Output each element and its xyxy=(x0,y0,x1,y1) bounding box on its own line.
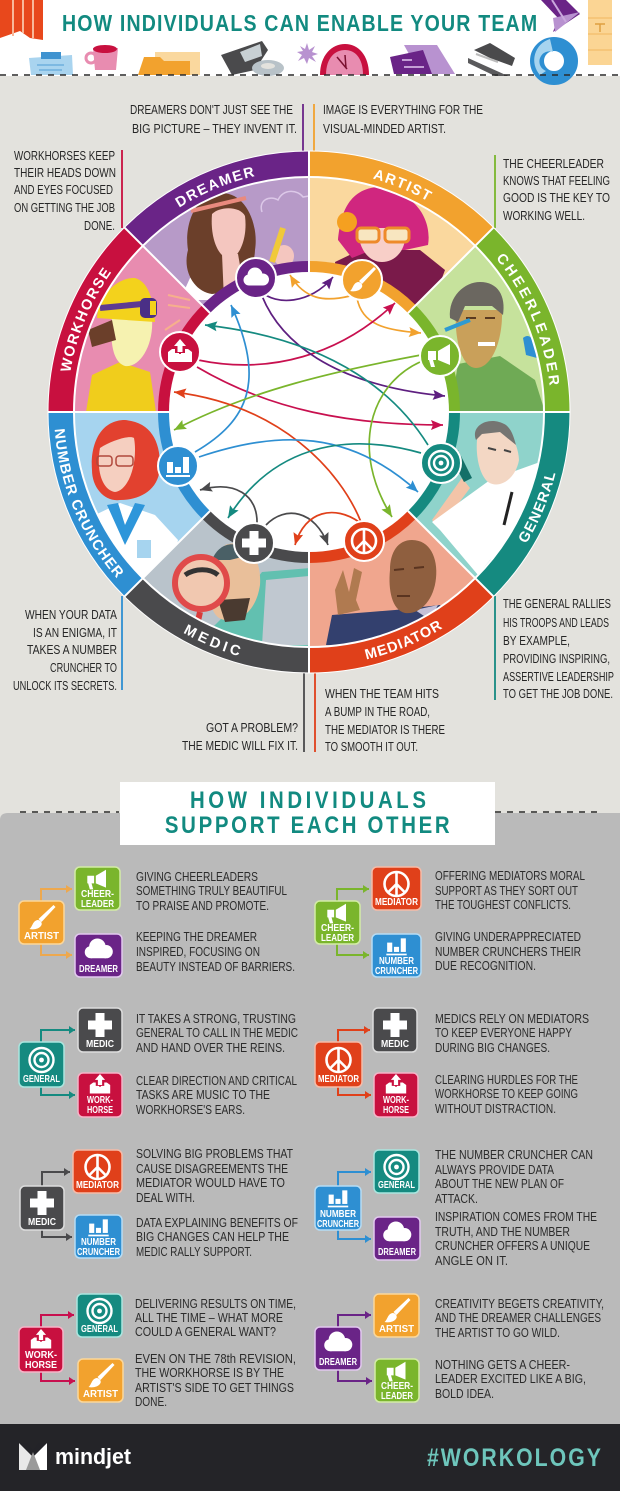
callout leader lines xyxy=(122,104,495,752)
icon: yellow toolbar xyxy=(588,0,612,65)
box: general: GENERAL xyxy=(378,1180,415,1191)
band labels: MEDIATOR xyxy=(364,621,442,660)
icon: purple documents xyxy=(390,45,455,74)
box: artist: ARTIST xyxy=(83,1389,118,1400)
text: workhorse to general xyxy=(135,1297,296,1339)
inner ring segments xyxy=(158,261,460,563)
text: number cruncher to general: ATTACK. xyxy=(435,1192,478,1206)
hashtag: #WORKOLOGY xyxy=(427,1443,601,1471)
band labels: MEDIC xyxy=(184,624,240,656)
box: workhorse: WORK- xyxy=(25,1350,57,1361)
box: dreamer: DREAMER xyxy=(79,964,119,975)
text: mediator to medic: MEDICS RELY ON MEDIATORS xyxy=(435,1012,589,1026)
text: artist to dreamer: KEEPING THE DREAMER xyxy=(136,930,257,944)
text: mediator to medic: DURING BIG CHANGES. xyxy=(435,1041,550,1055)
node: number cruncher xyxy=(158,446,198,486)
text: mediator to medic xyxy=(435,1012,589,1055)
band labels: NUMBER CRUNCHER xyxy=(54,429,123,578)
box: medic xyxy=(373,1008,417,1052)
callout: general: BY EXAMPLE, xyxy=(503,633,570,648)
text: dreamer to artist: THE ARTIST TO GO WILD. xyxy=(435,1326,560,1340)
box: mediator: MEDIATOR xyxy=(76,1180,120,1191)
text: workhorse to artist: DONE. xyxy=(135,1395,167,1409)
callout: mediator: WHEN THE TEAM HITS xyxy=(325,686,439,701)
node: artist xyxy=(342,260,382,300)
text: medic to number cruncher: MEDIC RALLY SUPPORT. xyxy=(136,1245,252,1259)
callout: cheerleader xyxy=(503,156,610,223)
box: number cruncher: CRUNCHER xyxy=(77,1247,121,1258)
callout: workhorse: THEIR HEADS DOWN xyxy=(14,165,116,180)
node: workhorse xyxy=(160,332,200,372)
box: dreamer xyxy=(315,1327,361,1370)
callout: cheerleader: WORKING WELL. xyxy=(503,208,585,223)
box: general xyxy=(19,1042,64,1087)
box: mediator xyxy=(73,1150,122,1193)
portrait: medic xyxy=(144,520,308,646)
box: workhorse xyxy=(78,1073,122,1117)
box: artist xyxy=(19,901,64,944)
callout: workhorse xyxy=(14,148,116,233)
portrait: number cruncher xyxy=(75,413,202,577)
text: mediator to workhorse: WORKHORSE TO KEEP GOING xyxy=(435,1087,578,1101)
title: HOW INDIVIDUALS CAN ENABLE YOUR TEAM xyxy=(62,11,537,36)
callout: artist: VISUAL-MINDED ARTIST. xyxy=(323,121,446,136)
icon: blue donut xyxy=(534,39,571,78)
box: general xyxy=(77,1294,122,1337)
group: artist supports xyxy=(19,867,295,977)
box: artist xyxy=(78,1359,123,1402)
callout: number cruncher xyxy=(13,607,117,693)
text: medic to number cruncher xyxy=(136,1216,298,1259)
text: workhorse to artist: ARTIST'S SIDE TO GET THINGS xyxy=(135,1381,294,1395)
box: dreamer: DREAMER xyxy=(378,1247,417,1258)
node: dreamer xyxy=(236,258,276,298)
icon: pink mug xyxy=(86,45,118,70)
text: artist to cheerleader: SOMETHING TRULY BEAUTIFUL xyxy=(136,884,287,898)
text: workhorse to artist: THE WORKHORSE IS BY THE xyxy=(135,1366,284,1380)
text: mediator to workhorse: WITHOUT DISTRACTION. xyxy=(435,1102,556,1116)
box: dreamer xyxy=(374,1217,420,1260)
text: medic to number cruncher: BIG CHANGES CAN HELP THE xyxy=(136,1230,289,1244)
box: cheerleader: CHEER- xyxy=(321,923,354,934)
box: medic: MEDIC xyxy=(381,1039,409,1050)
box: medic: MEDIC xyxy=(86,1039,114,1050)
icon: red books xyxy=(0,0,43,40)
text: cheerleader to mediator: OFFERING MEDIATORS MORAL xyxy=(435,869,585,883)
text: general to workhorse: CLEAR DIRECTION AND CRITICAL xyxy=(136,1074,297,1088)
text: dreamer to cheerleader xyxy=(435,1358,586,1401)
text: general to workhorse xyxy=(136,1074,297,1117)
callout: number cruncher: IS AN ENIGMA, IT xyxy=(33,625,117,640)
band labels: WORKHORSE xyxy=(60,267,112,371)
text: artist to dreamer: INSPIRED, FOCUSING ON xyxy=(136,945,260,959)
main panel background xyxy=(0,76,620,816)
relationship arrows xyxy=(174,275,445,545)
callout: workhorse: ON GETTING THE JOB xyxy=(14,200,115,215)
callout: workhorse: AND EYES FOCUSED xyxy=(14,182,113,197)
box: general: GENERAL xyxy=(23,1074,60,1085)
outer band segments xyxy=(48,151,570,673)
text: cheerleader to mediator xyxy=(435,869,585,912)
band labels: GENERAL xyxy=(519,473,556,542)
icon: stapler xyxy=(468,43,515,76)
text: number cruncher to general: THE NUMBER CRUNCHER CAN xyxy=(435,1148,593,1162)
box: dreamer xyxy=(75,934,122,977)
header background xyxy=(0,0,620,76)
box: cheerleader xyxy=(75,867,120,910)
dashed divider lower xyxy=(20,811,600,813)
group: number cruncher supports xyxy=(315,1148,597,1268)
portrait: artist xyxy=(310,178,474,304)
text: cheerleader to number cruncher: NUMBER CRUNCHERS THEIR xyxy=(435,945,581,959)
box: general: GENERAL xyxy=(81,1324,118,1335)
header icons row xyxy=(0,0,612,78)
group: dreamer supports xyxy=(315,1294,604,1402)
text: cheerleader to number cruncher: DUE RECOGNITION. xyxy=(435,959,536,973)
dashed divider top xyxy=(0,74,620,76)
box: artist: ARTIST xyxy=(24,931,59,942)
band labels: ARTIST xyxy=(373,170,432,200)
role wheel xyxy=(48,150,570,674)
text: medic to mediator xyxy=(136,1147,293,1205)
box: workhorse: HORSE xyxy=(25,1360,57,1371)
portrait: cheerleader xyxy=(416,247,543,411)
portrait: general xyxy=(416,413,543,577)
box: workhorse: WORK- xyxy=(383,1095,409,1106)
box: workhorse xyxy=(374,1073,418,1117)
text: dreamer to cheerleader: BOLD IDEA. xyxy=(435,1387,494,1401)
group: general supports xyxy=(19,1008,298,1117)
group: workhorse supports xyxy=(19,1294,296,1409)
band labels xyxy=(54,167,559,660)
callout: workhorse: DONE. xyxy=(84,218,115,233)
callout: workhorse: WORKHORSES KEEP xyxy=(14,148,115,163)
text: mediator to medic: TO KEEP EVERYONE HAPPY xyxy=(435,1026,573,1040)
box: medic xyxy=(78,1008,122,1052)
text: cheerleader to mediator: THE TOUGHEST CONFLICTS. xyxy=(435,898,571,912)
box: workhorse: HORSE xyxy=(87,1105,113,1116)
callout: mediator: THE MEDIATOR IS THERE xyxy=(325,722,445,737)
text: general to workhorse: TASKS ARE MUSIC TO THE xyxy=(136,1088,270,1102)
callout: dreamer xyxy=(130,102,297,136)
text: mediator to workhorse xyxy=(435,1073,578,1116)
icon: blue note xyxy=(29,52,73,75)
callout: number cruncher: UNLOCK ITS SECRETS. xyxy=(13,678,117,693)
box: cheerleader xyxy=(375,1359,419,1402)
callout: mediator xyxy=(325,686,445,754)
box: medic xyxy=(20,1186,64,1230)
white centre xyxy=(169,272,449,552)
icon: tape dispenser xyxy=(221,41,284,76)
callout: number cruncher: CRUNCHER TO xyxy=(50,660,117,675)
icon: purple spark xyxy=(297,43,318,64)
box: cheerleader: LEADER xyxy=(321,933,355,944)
node: mediator xyxy=(344,521,384,561)
text: general to medic: AND HAND OVER THE REINS. xyxy=(136,1041,285,1055)
node: medic xyxy=(234,523,274,563)
box: number cruncher: NUMBER xyxy=(320,1209,357,1220)
group: medic supports xyxy=(20,1147,298,1259)
text: workhorse to general: COULD A GENERAL WANT? xyxy=(135,1325,276,1339)
text: workhorse to general: ALL THE TIME – WHAT MORE xyxy=(135,1311,283,1325)
text: workhorse to artist xyxy=(135,1352,296,1409)
text: cheerleader to mediator: SUPPORT AS THEY SORT OUT xyxy=(435,884,578,898)
text: mediator to workhorse: CLEARING HURDLES FOR THE xyxy=(435,1073,578,1087)
box: general xyxy=(374,1150,419,1193)
box: mediator xyxy=(315,1042,362,1087)
text: workhorse to artist: EVEN ON THE 78th REVISION, xyxy=(135,1352,296,1366)
callout: number cruncher: WHEN YOUR DATA xyxy=(25,607,117,622)
box: dreamer: DREAMER xyxy=(319,1357,358,1368)
callout: medic: THE MEDIC WILL FIX IT. xyxy=(182,738,298,753)
box: cheerleader: CHEER- xyxy=(81,889,114,900)
text: medic to number cruncher: DATA EXPLAINING BENEFITS OF xyxy=(136,1216,298,1230)
mindjet logo xyxy=(19,1443,132,1470)
box: cheerleader: CHEER- xyxy=(381,1381,413,1392)
footer bar xyxy=(0,1424,620,1491)
text: general to medic: IT TAKES A STRONG, TRUSTING xyxy=(136,1012,296,1026)
box: artist xyxy=(374,1294,419,1337)
band labels: DREAMER xyxy=(174,167,255,208)
text: medic to mediator: CAUSE DISAGREEMENTS THE xyxy=(136,1162,288,1176)
box: number cruncher xyxy=(372,934,421,977)
icon: orange folder xyxy=(138,52,200,75)
callout: number cruncher: TAKES A NUMBER xyxy=(27,642,117,657)
box: number cruncher: CRUNCHER xyxy=(317,1219,360,1230)
text: number cruncher to dreamer: TRUTH, AND THE NUMBER xyxy=(435,1225,570,1239)
callout: artist xyxy=(323,102,483,136)
box: workhorse: HORSE xyxy=(383,1105,409,1116)
box: number cruncher: NUMBER xyxy=(379,956,415,967)
text: dreamer to cheerleader: NOTHING GETS A CHEER- xyxy=(435,1358,570,1372)
text: general to medic xyxy=(136,1012,298,1055)
section title box: HOW INDIVIDUALS xyxy=(190,786,426,813)
icon: purple pencil rocket xyxy=(541,0,580,32)
text: cheerleader to number cruncher: GIVING UNDERAPPRECIATED xyxy=(435,930,581,944)
box: number cruncher xyxy=(315,1186,361,1230)
portrait: dreamer xyxy=(144,178,308,304)
text: artist to cheerleader: GIVING CHEERLEADERS xyxy=(136,870,258,884)
box: mediator: MEDIATOR xyxy=(318,1074,360,1085)
callout: mediator: TO SMOOTH IT OUT. xyxy=(325,739,418,754)
text: cheerleader to number cruncher xyxy=(435,930,581,973)
box: cheerleader: LEADER xyxy=(381,1391,414,1402)
group: cheerleader supports xyxy=(315,867,585,977)
text: number cruncher to dreamer: ANGLE ON IT. xyxy=(435,1254,508,1268)
box: number cruncher: NUMBER xyxy=(81,1237,117,1248)
text: dreamer to artist xyxy=(435,1297,604,1340)
box: number cruncher: CRUNCHER xyxy=(375,966,419,977)
text: medic to mediator: SOLVING BIG PROBLEMS THAT xyxy=(136,1147,293,1161)
portrait: workhorse xyxy=(75,247,202,411)
box: workhorse xyxy=(19,1327,63,1372)
mindjet logo: mindjet xyxy=(55,1444,132,1469)
band labels: CHEERLEADER xyxy=(498,254,559,386)
box: artist: ARTIST xyxy=(379,1324,414,1335)
callout: medic xyxy=(182,720,298,753)
callout: artist: IMAGE IS EVERYTHING FOR THE xyxy=(323,102,483,117)
text: artist to cheerleader xyxy=(136,870,287,913)
box: medic: MEDIC xyxy=(28,1217,56,1228)
text: artist to dreamer xyxy=(136,930,295,974)
node: general xyxy=(421,443,461,483)
box: mediator xyxy=(372,867,421,910)
box: number cruncher xyxy=(75,1215,122,1258)
text: number cruncher to general: ALWAYS PROVIDE DATA xyxy=(435,1163,555,1177)
callout: mediator: A BUMP IN THE ROAD, xyxy=(325,704,430,719)
text: medic to mediator: MEDIATOR WOULD HAVE TO xyxy=(136,1176,285,1190)
text: artist to dreamer: BEAUTY INSTEAD OF BARRIERS. xyxy=(136,960,295,974)
text: artist to cheerleader: TO PRAISE AND PROMOTE. xyxy=(136,899,269,913)
text: general to medic: GENERAL TO CALL IN THE MEDIC xyxy=(136,1026,298,1040)
box: cheerleader: LEADER xyxy=(81,899,115,910)
callout: dreamer: BIG PICTURE – THEY INVENT IT. xyxy=(132,121,297,136)
callout: dreamer: DREAMERS DON'T JUST SEE THE xyxy=(130,102,293,117)
text: number cruncher to general xyxy=(435,1148,593,1206)
text: number cruncher to dreamer xyxy=(435,1210,597,1268)
text: dreamer to cheerleader: LEADER EXCITED LIKE A BIG, xyxy=(435,1372,586,1386)
text: medic to mediator: DEAL WITH. xyxy=(136,1191,195,1205)
box: cheerleader xyxy=(315,901,360,944)
text: general to workhorse: WORKHORSE'S EARS. xyxy=(136,1103,245,1117)
text: number cruncher to dreamer: CRUNCHER OFFERS A UNIQUE xyxy=(435,1239,590,1253)
node: cheerleader xyxy=(420,336,460,376)
section title box: SUPPORT EACH OTHER xyxy=(165,811,450,838)
box: workhorse: WORK- xyxy=(87,1095,113,1106)
section title box xyxy=(120,782,495,845)
box: mediator: MEDIATOR xyxy=(375,897,419,908)
callout: medic: GOT A PROBLEM? xyxy=(206,720,298,735)
wheel separators xyxy=(48,151,570,673)
callout: general xyxy=(503,596,614,701)
text: workhorse to general: DELIVERING RESULTS ON TIME, xyxy=(135,1297,296,1311)
portrait: mediator xyxy=(310,520,474,646)
icon: clock xyxy=(320,44,369,75)
group: mediator supports xyxy=(315,1008,589,1117)
text: number cruncher to general: ABOUT THE NEW PLAN OF xyxy=(435,1177,564,1191)
support panel background xyxy=(0,813,620,1425)
